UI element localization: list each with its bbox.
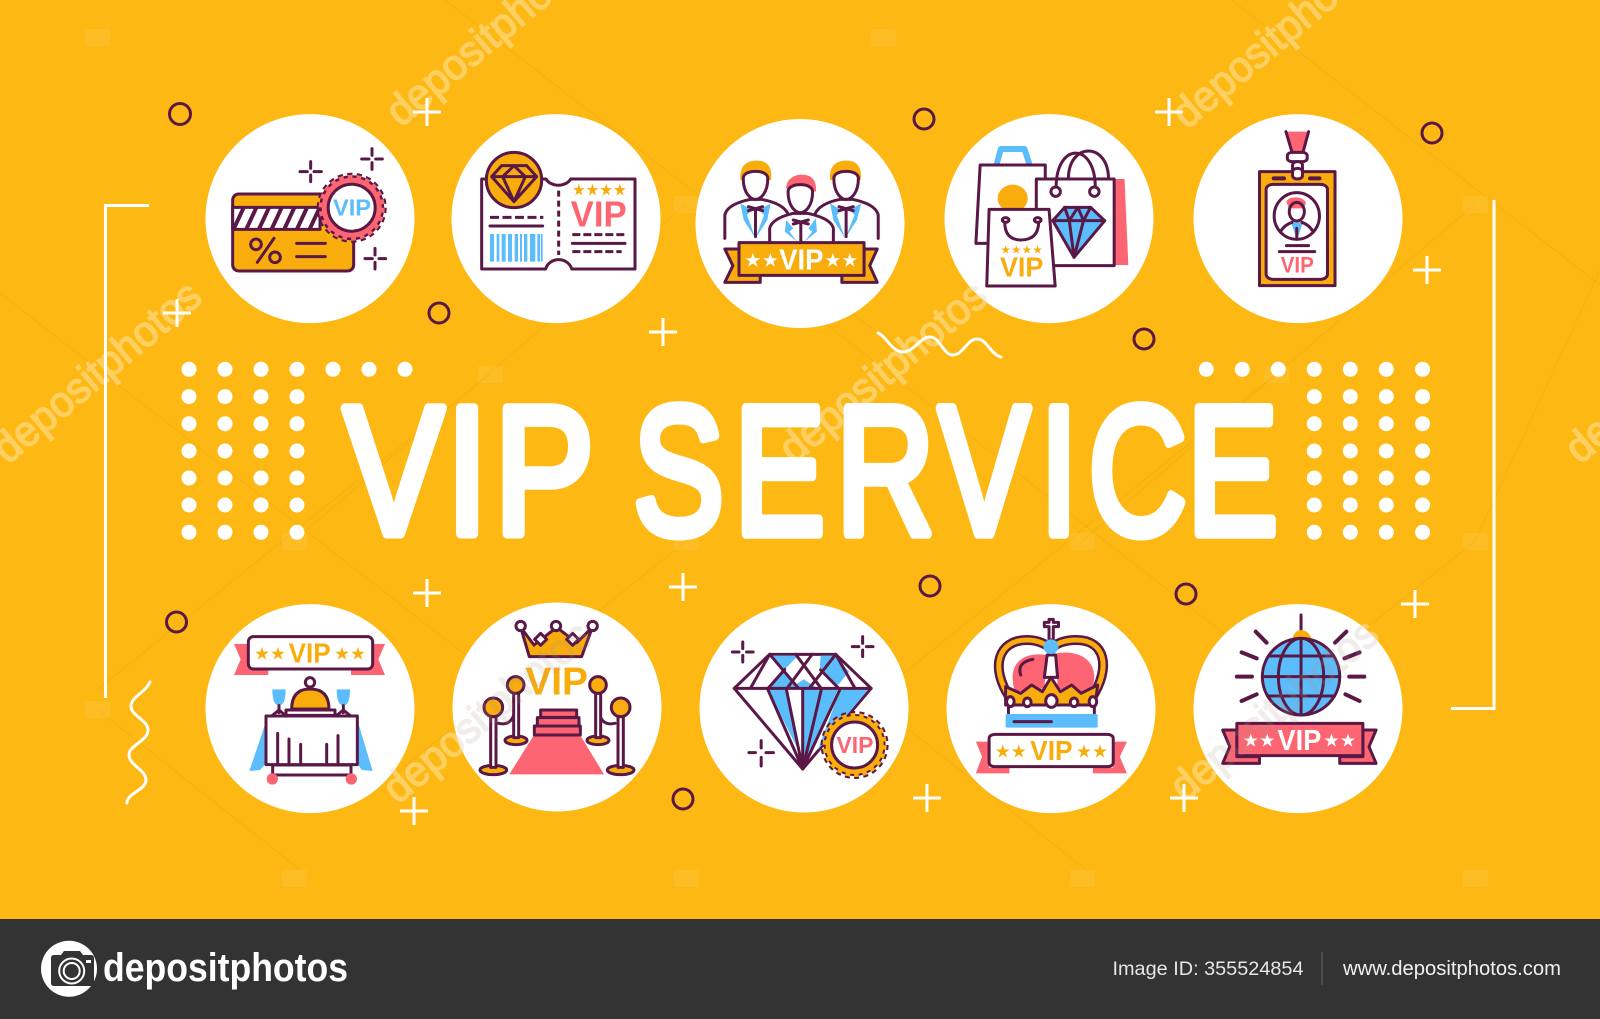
panel: VIP diamond xyxy=(700,604,908,812)
icon: credit card with badge xyxy=(233,149,386,271)
panel: VIP red carpet xyxy=(452,602,662,812)
watermarks xyxy=(0,0,1600,813)
icon: red carpet xyxy=(480,621,634,775)
rings xyxy=(166,104,1442,809)
icon: id badge with lanyard: VIP xyxy=(1281,253,1314,277)
website: www.depositphotos.com xyxy=(1342,958,1561,980)
image id: Image ID: 355524854 xyxy=(1112,958,1304,980)
watermark tint over circles: depositphotos xyxy=(374,611,601,813)
dot grid right xyxy=(1199,362,1430,540)
panel: VIP crown xyxy=(946,604,1156,813)
icon: three men with banner xyxy=(725,161,878,282)
panel: VIP people xyxy=(696,119,904,328)
icon: disco ball with banner xyxy=(1223,615,1376,763)
icon: three men with banner: VIP xyxy=(779,243,823,276)
icon: serving table: ★★ xyxy=(334,645,366,665)
plus signs xyxy=(163,98,1441,825)
watermark tint over circles: depositphotos xyxy=(1161,609,1388,811)
icon: disco ball with banner: ★★ xyxy=(1323,731,1356,752)
watermark tint over circles: depositphotos xyxy=(770,271,997,473)
icon: id badge with lanyard xyxy=(1260,132,1335,286)
icon: royal crown: ★★ xyxy=(1076,742,1108,762)
icon: royal crown xyxy=(976,619,1127,773)
watermarks: depositphotos xyxy=(374,611,601,813)
icon: credit card with badge: VIP xyxy=(333,194,371,220)
panel: VIP pass xyxy=(1194,114,1402,323)
icon: royal crown: ★★ xyxy=(995,742,1027,762)
panel: VIP shopping xyxy=(944,114,1154,323)
title xyxy=(344,369,1278,573)
icon: red carpet: VIP xyxy=(525,659,588,703)
panel: VIP ticket xyxy=(452,114,660,323)
icon: serving table xyxy=(234,637,385,785)
icon: ticket: ★★★★ xyxy=(572,180,627,199)
panel: VIP disco ball xyxy=(1194,604,1402,813)
icon: disco ball with banner: ★★ xyxy=(1243,731,1276,752)
icon: ticket xyxy=(482,152,635,269)
dot grid left xyxy=(182,362,412,540)
icon: serving table: ★★ xyxy=(254,645,286,665)
watermark tint over circles xyxy=(390,286,1378,780)
icon: diamond with badge xyxy=(732,637,886,776)
icon: three men with banner: ★★ xyxy=(824,250,858,272)
footer bar xyxy=(0,919,1600,1019)
icon: shopping bags: ★★★★ xyxy=(1000,244,1043,257)
icon: royal crown: VIP xyxy=(1030,736,1073,767)
top squiggle xyxy=(878,333,1001,357)
right bracket xyxy=(1451,200,1494,708)
left bracket xyxy=(106,206,149,698)
footer logo: depositphotos xyxy=(103,946,348,990)
icon: diamond with badge: VIP xyxy=(836,732,874,758)
title: SERVICE xyxy=(633,370,1278,573)
icon: ticket: VIP xyxy=(571,194,627,235)
panel: VIP card xyxy=(206,114,414,323)
icon: serving table: VIP xyxy=(289,638,331,669)
icon: shopping bags: VIP xyxy=(1000,252,1043,283)
footer logo xyxy=(41,941,348,997)
left squiggle xyxy=(127,682,150,803)
icon: disco ball with banner: VIP xyxy=(1277,724,1321,757)
watermarks: depositphotos xyxy=(770,271,997,473)
panel: VIP room service xyxy=(206,604,414,813)
watermarks: depositphotos xyxy=(1161,609,1388,811)
icon: shopping bags xyxy=(976,149,1128,286)
title: VIP xyxy=(344,369,594,573)
icon: three men with banner: ★★ xyxy=(744,250,779,272)
